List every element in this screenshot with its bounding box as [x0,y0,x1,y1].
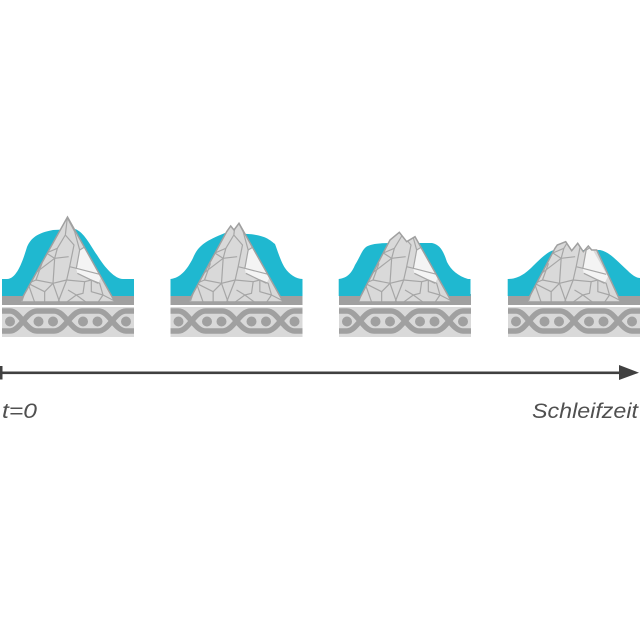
abrasive grain [20,217,115,302]
blue bond [508,250,640,296]
substrate and chain layer [2,294,134,337]
abrasive grain [527,242,621,302]
grain cracks [22,218,115,302]
grain cracks [190,225,282,302]
label: Schleifzeit: Schleifzeit [532,400,639,423]
grain outline [358,232,452,302]
stage 3 [338,231,471,337]
label: t=0: t=0 [2,400,37,423]
blue bond [170,233,302,296]
stage 2 [170,218,302,337]
stage 4: worn grain [508,240,640,337]
grain cracks [528,244,620,302]
blue bond [2,229,134,296]
blue bond [339,243,470,296]
abrasive grain [188,223,283,302]
stage 1: t=0 grain profile [2,217,134,337]
grain outline [188,223,283,302]
substrate and chain layer [339,294,471,337]
arrow: time axis [0,365,639,380]
substrate and chain layer [508,294,640,337]
grain cracks [359,236,450,302]
grain outline [527,242,621,302]
grain outline [20,217,115,302]
abrasive grain [358,232,452,302]
substrate and chain layer [170,294,302,337]
